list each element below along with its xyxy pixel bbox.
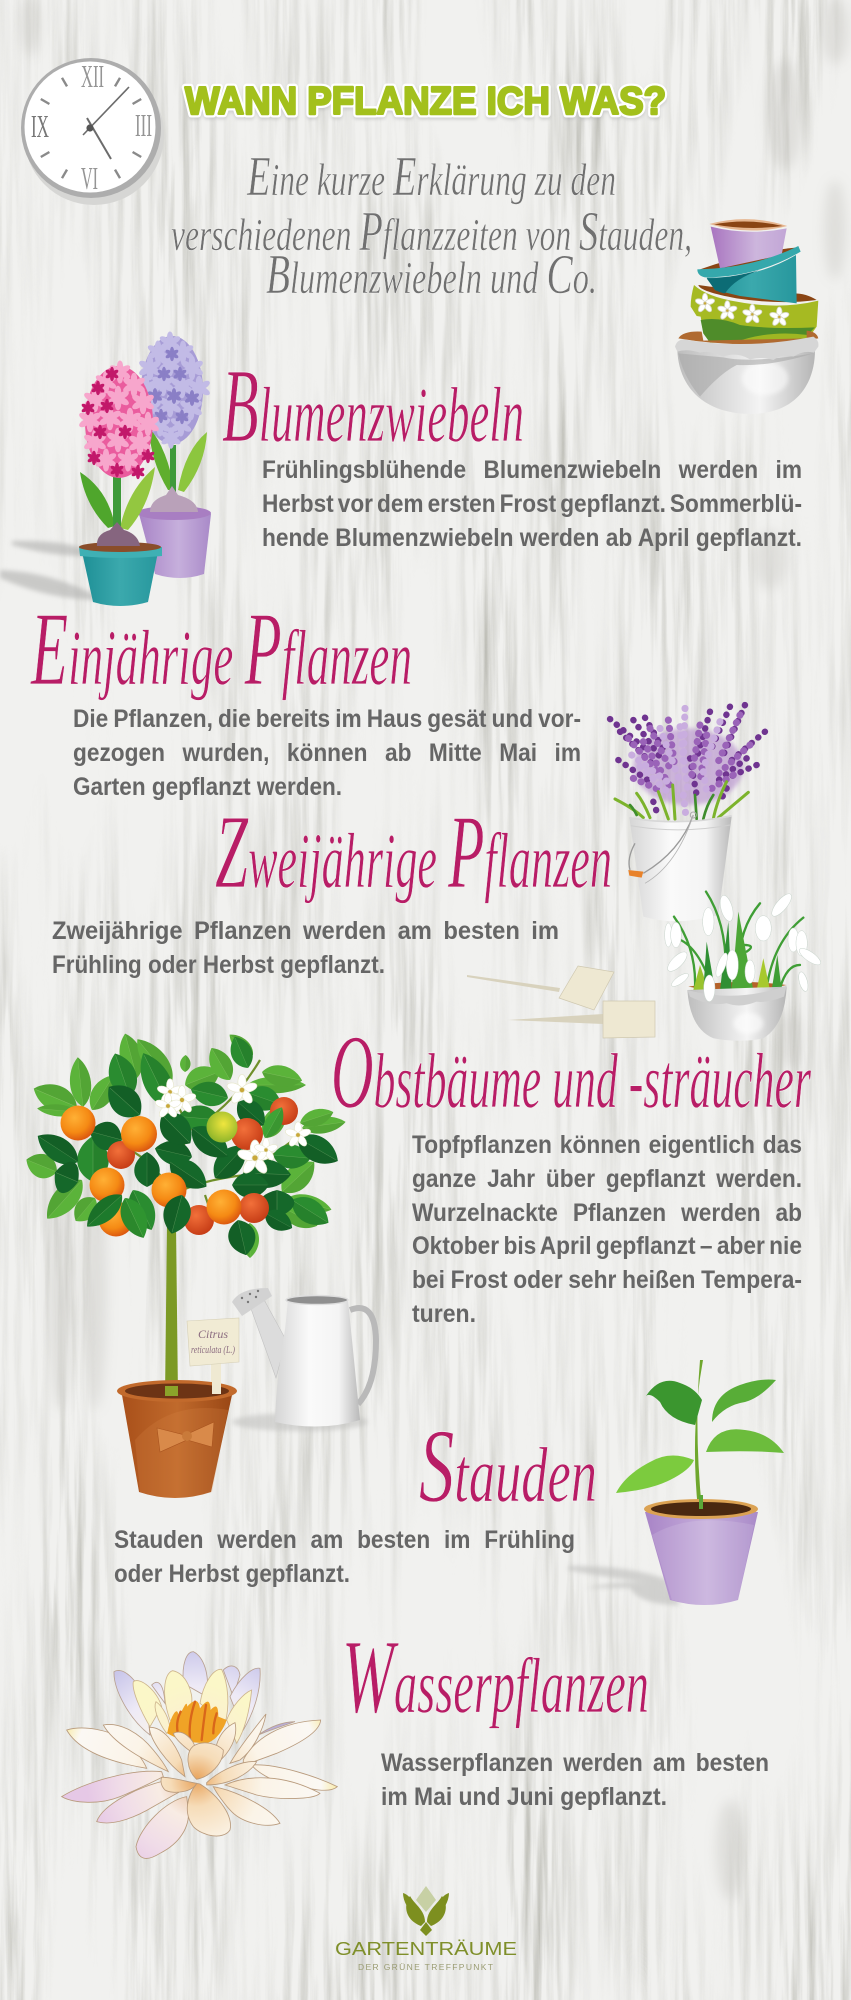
text: Wasserpflanzen: Wasserpflanzen werden am besten (381, 1749, 769, 1777)
blades (674, 892, 803, 988)
purple bulb pot (137, 486, 211, 578)
side and front petals (67, 1714, 337, 1825)
logo (335, 1886, 517, 1972)
purple flower head (134, 331, 211, 449)
cast shadow (568, 1566, 680, 1605)
green decorated pot (691, 285, 818, 343)
subtitle: verschiedenen Pflanzzeiten von Stauden, (171, 201, 692, 263)
bowl (687, 975, 787, 1041)
text: Wasserpflanzen: im Mai und Juni gepflanzt. (381, 1783, 667, 1811)
oranges (60, 1097, 298, 1236)
icon: orange tree in pot (22, 1030, 347, 1498)
text: Stauden: oder Herbst gepflanzt. (114, 1560, 350, 1588)
white bowl (675, 331, 818, 414)
text: Stauden (114, 1526, 575, 1588)
upper petals (133, 1669, 252, 1743)
pink flower head (78, 360, 160, 479)
title: WANN PFLANZE ICH WAS? (185, 80, 666, 123)
bucket (628, 812, 732, 921)
text: Einjährige Pflanzen (73, 705, 581, 801)
text: Obstbäume und -sträucher: bei Frost oder sehr heißen Tempera- (412, 1266, 802, 1294)
blossoms (665, 891, 823, 992)
text: Einjährige Pflanzen: Die Pflanzen, die bereits im Haus gesät und vor- (73, 705, 581, 733)
trunk (165, 1225, 178, 1397)
icon: watering can (232, 1288, 376, 1431)
icon: hyacinth pots (0, 331, 211, 606)
leaves (616, 1360, 784, 1510)
icon: wall clock: XII (81, 58, 104, 94)
lavender flowers (610, 705, 765, 819)
canopy leaves: back layer (22, 1030, 347, 1258)
pot (644, 1495, 758, 1605)
icon: wall clock: VI (81, 160, 98, 196)
heading: Zweijährige Pflanzen: Zweijährige Pflanzen (215, 793, 612, 910)
icon: water lily (62, 1652, 337, 1858)
citrus plant tag: reticulata (L.) (191, 1345, 236, 1356)
text: Zweijährige Pflanzen (52, 917, 559, 979)
text: Blumenzwiebeln: Herbst vor dem ersten Frost gepflanzt. Sommerblü- (262, 490, 802, 518)
text: Obstbäume und -sträucher: turen. (412, 1300, 476, 1328)
citrus plant tag: Citrus (198, 1327, 228, 1341)
icon: seedling in purple pot (568, 1360, 784, 1605)
cast shadows (0, 541, 100, 600)
branches (114, 1060, 300, 1230)
text: Blumenzwiebeln (262, 456, 802, 552)
back petals (114, 1652, 295, 1735)
text: Blumenzwiebeln: hende Blumenzwiebeln werden ab April gepflanzt. (262, 524, 802, 552)
text: Blumenzwiebeln: Frühlingsblühende Blumenzwiebeln werden im (262, 456, 802, 484)
pink hyacinth leaves (80, 467, 155, 530)
citrus plant tag (187, 1318, 239, 1394)
icon: wall clock (21, 58, 164, 205)
purple hyacinth leaves (149, 427, 207, 492)
logo mark (403, 1886, 449, 1936)
lower petals (62, 1771, 230, 1858)
text: Einjährige Pflanzen: Garten gepflanzt werden. (73, 773, 342, 801)
logo: DER GRÜNE TREFFPUNKT (358, 1962, 493, 1972)
icon: wall clock: III (135, 107, 152, 143)
text: Obstbäume und -sträucher: Oktober bis April gepflanzt – aber nie (412, 1232, 802, 1260)
text: Einjährige Pflanzen: gezogen wurden, können ab Mitte Mai im (73, 739, 581, 767)
terracotta insides (698, 247, 817, 302)
icon: lavender in bucket (610, 705, 765, 921)
stamens (167, 1701, 227, 1743)
text: Stauden: Stauden werden am besten im Frühling (114, 1526, 575, 1554)
text: Obstbäume und -sträucher: Wurzelnackte Pflanzen werden ab (412, 1199, 802, 1227)
bowl back (688, 982, 787, 991)
title: WANN PFLANZE ICH WAS? (185, 80, 666, 123)
icon: wall clock: IX (31, 108, 49, 144)
heading: Wasserpflanzen: Wasserpflanzen (342, 1618, 649, 1735)
heading: Einjährige Pflanzen: Einjährige Pflanzen (30, 590, 412, 707)
text: Zweijährige Pflanzen: Zweijährige Pflanzen werden am besten im (52, 917, 559, 945)
text: Zweijährige Pflanzen: Frühling oder Herbst gepflanzt. (52, 951, 385, 979)
leaves (693, 912, 782, 990)
heading: Blumenzwiebeln: Blumenzwiebeln (222, 347, 524, 464)
text: Obstbäume und -sträucher: Topfpflanzen können eigentlich das (412, 1131, 802, 1159)
canopy leaves: mid layer (77, 1033, 335, 1235)
terracotta pot (117, 1380, 237, 1498)
icon: snowdrops in bowl (665, 891, 823, 1041)
teal pot (697, 246, 801, 303)
white blossoms (154, 1074, 312, 1175)
text: Obstbäume und -sträucher (412, 1131, 802, 1328)
logo: GARTENTRÄUME (335, 1938, 517, 1959)
icon: stacked flower pots (675, 219, 818, 414)
front leaves (80, 1103, 289, 1243)
text: Wasserpflanzen (381, 1749, 769, 1811)
canopy leaves: dark layer (31, 1076, 344, 1258)
heading: Stauden: Stauden (419, 1407, 597, 1524)
subtitle (171, 146, 692, 306)
bow (157, 1422, 214, 1452)
purple pot (709, 219, 787, 268)
text: Obstbäume und -sträucher: ganze Jahr über gepflanzt werden. (412, 1165, 802, 1193)
subtitle: Eine kurze Erklärung zu den (246, 146, 616, 208)
subtitle: Blumenzwiebeln und Co. (266, 244, 597, 306)
icon: blank plant labels (467, 966, 655, 1038)
teal bulb pot (79, 522, 162, 606)
